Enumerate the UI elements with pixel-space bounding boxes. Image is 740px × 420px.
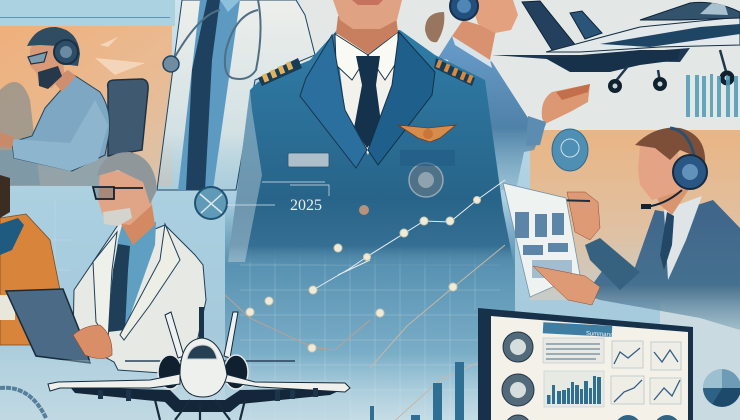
tie: [354, 56, 382, 148]
person: doctor with stethoscope top-centre: [157, 0, 315, 190]
monitor dashboard: [478, 308, 693, 420]
left epaulette: [258, 58, 302, 86]
medal: [409, 163, 443, 197]
right epaulette: [434, 58, 475, 86]
heading: [543, 322, 612, 338]
shirt: [105, 222, 156, 330]
panel: orange backdrop left: [0, 26, 172, 186]
rear stabiliser: [125, 360, 295, 362]
coat: [73, 222, 206, 375]
gear: [155, 400, 245, 420]
nose: [180, 338, 227, 397]
emblem: partial compass bottom-left: [0, 388, 46, 418]
engines: [158, 355, 182, 389]
glasses: [93, 187, 143, 199]
person: female pilot with headset top-right: [425, 0, 590, 190]
face: [638, 143, 684, 200]
jet: top right: [492, 1, 740, 93]
beard: [38, 66, 62, 89]
tail fins: [522, 1, 577, 50]
dial gauges: [502, 332, 534, 420]
jacket: [438, 36, 546, 190]
frame: [478, 308, 693, 420]
fins: [165, 312, 184, 358]
chair: [108, 79, 148, 156]
tablet: [6, 289, 90, 363]
screen bars: [544, 371, 604, 407]
coat: [157, 0, 315, 190]
ponytail: [425, 12, 444, 42]
text lines: [543, 338, 604, 363]
shirt and collar: [335, 34, 398, 155]
arm upper: [585, 238, 640, 290]
pocket lines: [400, 150, 455, 166]
pylons: [98, 388, 318, 401]
bar chart: background top right: [686, 74, 738, 117]
heading: Summary: [586, 331, 612, 338]
hair: [27, 27, 80, 66]
person: analyst with headset right: [552, 128, 740, 330]
headphone: [54, 40, 78, 64]
jacket: [228, 30, 515, 270]
decorative smudge: left panel map: [0, 37, 145, 186]
canopy: [640, 2, 740, 20]
main figure: pilot in blue uniform: [228, 0, 515, 270]
neck: [336, 16, 398, 54]
pie chart: [703, 369, 740, 407]
headset: [641, 128, 707, 209]
tie: [108, 244, 130, 332]
face: [98, 171, 152, 225]
neck: [452, 20, 496, 60]
hand on page top: [567, 192, 600, 240]
grid: [0, 190, 500, 420]
face: [470, 0, 518, 33]
tie: [660, 212, 674, 270]
wing: [492, 48, 690, 62]
hand on tablet: [73, 325, 112, 358]
year label: 2025: [290, 197, 322, 214]
cuff: [526, 116, 546, 146]
tie: [186, 0, 220, 190]
wings: [48, 374, 180, 391]
person: hooded figure in orange: [0, 175, 60, 345]
hand on page: [533, 266, 600, 305]
lapels: [93, 232, 117, 340]
beard: [103, 208, 132, 226]
shirt: [664, 196, 702, 280]
landing gear: [615, 50, 727, 82]
panel: orange backdrop right: [530, 130, 740, 300]
hand: [73, 325, 112, 358]
face: [333, 0, 402, 29]
hand: [542, 84, 590, 124]
neck: [52, 70, 76, 92]
stethoscope: [172, 0, 261, 79]
document held by analyst: [503, 183, 600, 305]
hair: [635, 128, 705, 165]
small line charts: [611, 341, 681, 404]
lower fuselage: [545, 50, 680, 72]
collar: [220, 0, 240, 12]
hair: [97, 152, 157, 204]
upper fuselage: [546, 17, 740, 52]
button: [359, 205, 369, 215]
glasses: [28, 52, 47, 64]
left lapel: [300, 35, 367, 168]
hand: [0, 132, 14, 148]
lower wing: [70, 387, 345, 412]
wings badge: [398, 125, 456, 142]
torso: [12, 75, 110, 171]
name plate: [288, 153, 329, 167]
bar chart: bottom centre: [370, 362, 464, 420]
right lapel: [368, 32, 435, 165]
face: [30, 36, 64, 88]
screen: [491, 316, 688, 420]
panel fade lower-left: [0, 360, 350, 420]
bottom row: [615, 415, 680, 420]
headset: [450, 0, 478, 20]
line chart: trend with nodes: [225, 180, 505, 420]
jet: bottom centre, front view: [48, 307, 350, 420]
emblem: blue seal right: [552, 129, 588, 171]
shirt: [178, 0, 240, 190]
neck: [650, 180, 695, 215]
canopy: [187, 345, 217, 359]
person: bearded doctor with tablet: [73, 152, 206, 375]
person: headset technician top-left: [0, 27, 148, 171]
emblem: compass left of pilot: [195, 187, 275, 219]
suit: [585, 200, 740, 330]
neck: [120, 205, 155, 245]
